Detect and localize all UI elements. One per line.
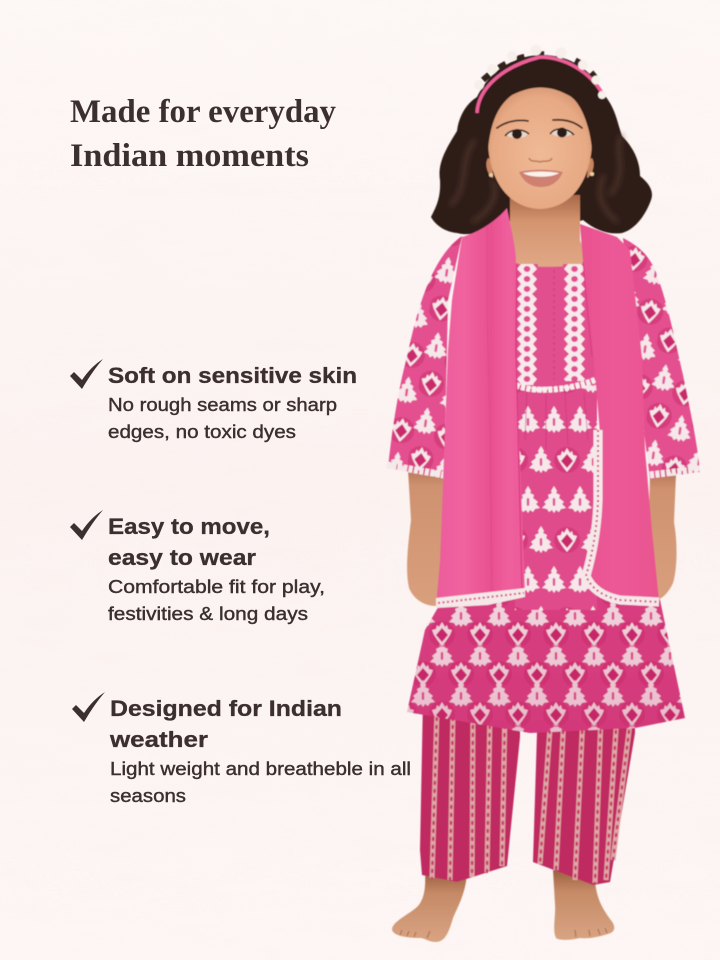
- benefit description: [108, 395, 337, 442]
- yoke lace: [516, 380, 595, 390]
- hair highlights: [450, 135, 622, 222]
- hair back: [431, 55, 652, 234]
- benefit description: festivities & long days: [108, 604, 308, 624]
- face: [488, 85, 592, 209]
- benefit description: edges, no toxic dyes: [108, 422, 296, 442]
- benefit: designed for Indian weather: [72, 692, 411, 806]
- left cuff lace: [387, 465, 444, 475]
- left arm and hand: [407, 470, 444, 606]
- benefit heading: weather: [109, 727, 209, 752]
- benefit: soft on sensitive skin: [70, 359, 357, 442]
- benefit description: seasons: [110, 786, 186, 806]
- right dupatta: [580, 224, 659, 602]
- benefit heading: [108, 514, 270, 570]
- kurta body: [407, 262, 685, 733]
- benefit description: No rough seams or sharp: [108, 395, 337, 415]
- benefit: easy to move: [70, 510, 325, 624]
- benefit heading: Easy to move,: [108, 514, 270, 539]
- pants: [420, 700, 635, 885]
- right pant leg: [533, 700, 635, 885]
- benefit description: Light weight and breatheble in all: [110, 759, 411, 779]
- yoke panel: [513, 262, 597, 388]
- title: Made for everyday: [70, 94, 336, 130]
- front hair: [487, 71, 593, 150]
- title: Indian moments: [70, 138, 309, 174]
- neck: [510, 195, 592, 270]
- upper gathered panel: [515, 384, 597, 610]
- icon: check mark: [70, 510, 103, 540]
- head: [486, 71, 594, 209]
- left sleeve: [387, 236, 462, 478]
- left pant leg: [420, 700, 520, 882]
- nose: [529, 158, 552, 162]
- smile: [519, 170, 563, 187]
- right cuff lace: [650, 469, 700, 475]
- benefit description: [108, 577, 325, 624]
- benefit description: [110, 759, 411, 806]
- left dupatta lace hem: [436, 588, 525, 608]
- right sleeve: [623, 238, 700, 479]
- icon: check mark: [70, 359, 103, 389]
- right arm and hand: [648, 474, 677, 600]
- headband: [474, 44, 606, 113]
- left dupatta: [436, 208, 525, 608]
- title: [70, 94, 336, 174]
- benefit description: Comfortable fit for play,: [108, 577, 325, 597]
- eyes: [505, 128, 574, 139]
- benefit heading: Designed for Indian: [110, 696, 342, 721]
- ears and earrings: [486, 158, 594, 178]
- right dupatta lace edge: [586, 430, 659, 602]
- benefit heading: [109, 696, 342, 752]
- benefit heading: Soft on sensitive skin: [108, 363, 357, 388]
- benefit heading: easy to wear: [108, 545, 256, 570]
- icon: check mark: [72, 692, 105, 722]
- eyebrows: [497, 120, 582, 128]
- girl in pink kurta set: [387, 44, 700, 942]
- skirt with print: [407, 500, 685, 733]
- feet: [392, 870, 614, 942]
